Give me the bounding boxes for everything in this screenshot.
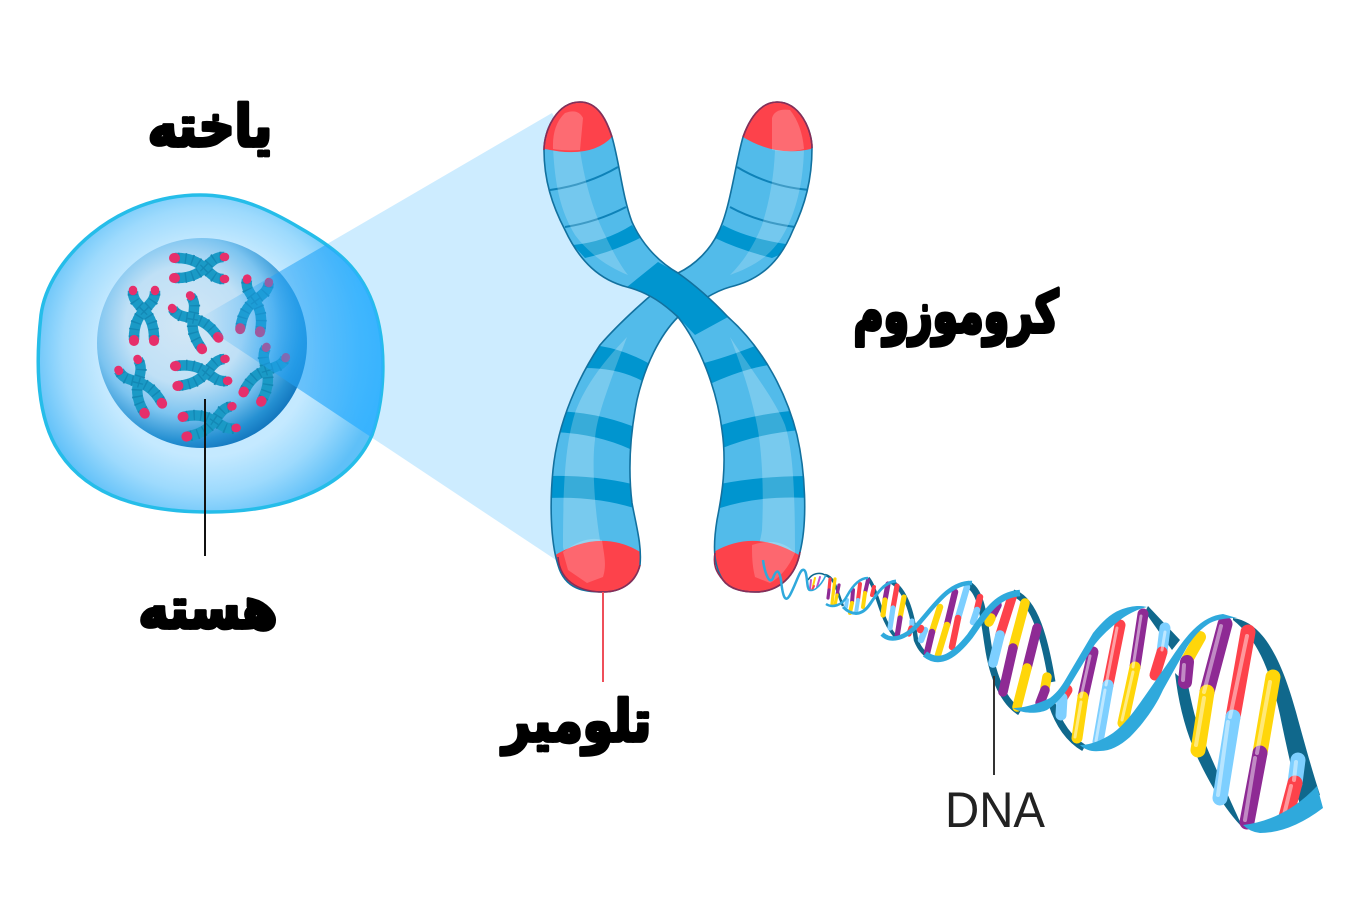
- zoom cone from nucleus to chromosome: [200, 113, 650, 560]
- nucleus: [97, 238, 307, 448]
- heading: chromosome: کروموزوم: [853, 279, 1059, 347]
- dna base pairs: [810, 577, 1298, 822]
- cell: [36, 193, 385, 514]
- tiny base pairs: [810, 577, 820, 590]
- chromosome front arm: upper left to lower right: [541, 95, 810, 600]
- pointer line: dna: [993, 676, 995, 775]
- large base pairs: middle turn: [1061, 614, 1165, 742]
- dna helix: [763, 560, 1323, 833]
- pointer line: nucleus: [204, 399, 206, 556]
- telomere: lower left: [556, 540, 640, 592]
- telomere: upper right: [744, 102, 812, 152]
- telomere: lower right: [715, 540, 798, 592]
- chromosome back arm: upper right to lower left: [548, 95, 815, 600]
- cone overlay within cell: [204, 244, 383, 437]
- label: telomere: تلومیر: [500, 688, 651, 755]
- heading: cell: یاخته: [148, 93, 272, 160]
- pointer line: telomere: [602, 592, 604, 682]
- large base pairs: last turn: [1185, 624, 1298, 822]
- small chromosomes inside nucleus: [118, 257, 286, 438]
- dna front strand: [763, 560, 1323, 833]
- label: nucleus: هسته: [139, 575, 277, 642]
- telomere: upper left: [544, 102, 612, 152]
- medium base pairs: [989, 597, 1047, 707]
- cell body: [38, 195, 383, 512]
- crossing band: [627, 262, 728, 335]
- chromosome: [541, 95, 815, 600]
- label: dna: DNA: [945, 782, 1046, 838]
- dna back strand: [808, 573, 1320, 828]
